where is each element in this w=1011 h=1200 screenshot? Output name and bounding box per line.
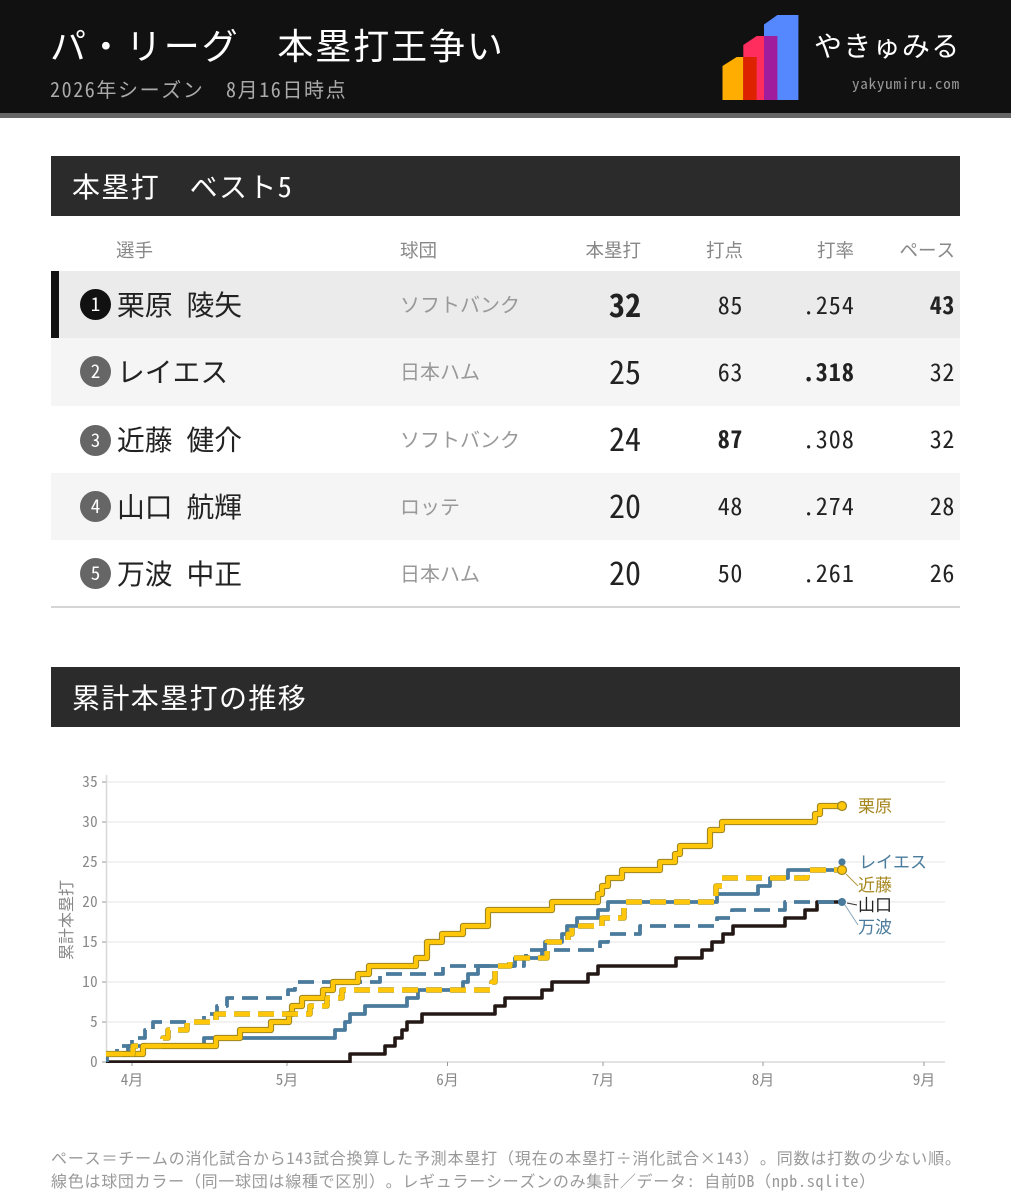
line chart: cumulative home runs xyxy=(53,771,945,1090)
footnote xyxy=(51,1145,962,1192)
leader lines xyxy=(845,874,858,925)
row 1: ソフトバンク xyxy=(400,289,520,318)
logo mark xyxy=(722,15,798,100)
line: Kurihara xyxy=(106,806,842,1054)
x axis month labels: 5月 xyxy=(276,1069,298,1090)
row 3: 87 xyxy=(718,420,743,455)
column headers: ペース xyxy=(899,237,955,263)
row 4 xyxy=(51,473,960,540)
row 5: 20 xyxy=(609,549,641,595)
column headers xyxy=(116,237,955,263)
y axis tick labels: 25 xyxy=(82,851,98,872)
row 1: 85 xyxy=(718,286,743,321)
subtitle: 2026年シーズン 8月16日時点 xyxy=(50,74,347,103)
row 4: 48 xyxy=(718,487,743,522)
y axis tick labels: 5 xyxy=(90,1011,98,1032)
row 2: .318 xyxy=(803,353,855,388)
y axis title: 累計本塁打 xyxy=(53,880,77,960)
row 3: ソフトバンク xyxy=(400,424,520,453)
series labels: 近藤 xyxy=(858,871,892,896)
row 4: 20 xyxy=(609,482,641,528)
row 2: 63 xyxy=(718,353,743,388)
y axis tick labels: 0 xyxy=(90,1051,98,1072)
row 4: 28 xyxy=(930,487,955,522)
row 1: 1 xyxy=(91,290,100,317)
heading: best 5 xyxy=(51,156,960,216)
series labels: 栗原 xyxy=(858,792,892,817)
header band xyxy=(0,0,1011,118)
x axis month labels: 9月 xyxy=(913,1069,935,1090)
line: Yamaguchi xyxy=(106,902,842,1062)
column headers: 選手 xyxy=(116,237,153,263)
column headers: 打率 xyxy=(817,237,854,263)
x axis month labels: 4月 xyxy=(121,1069,143,1090)
row 4: ロッテ xyxy=(400,491,460,520)
row 2: 25 xyxy=(609,348,641,394)
series labels: レイエス xyxy=(859,848,927,873)
row 2: 日本ハム xyxy=(400,356,480,385)
x axis month labels: 7月 xyxy=(592,1069,614,1090)
row 4: 4 xyxy=(91,492,100,519)
y axis tick labels: 10 xyxy=(82,971,98,992)
title: パ・リーグ 本塁打王争い xyxy=(50,18,505,70)
y axis tick labels: 15 xyxy=(82,931,98,952)
footnote: ペース＝チームの消化試合から143試合換算した予測本塁打（現在の本塁打÷消化試合×143）。同数は打数の少ない順。 xyxy=(51,1145,962,1169)
row 5 xyxy=(51,540,960,608)
row 1: 32 xyxy=(609,281,641,327)
column headers: 本塁打 xyxy=(585,237,641,263)
end point markers xyxy=(838,802,846,906)
row 5: .261 xyxy=(803,554,855,589)
row 2: レイエス xyxy=(117,351,228,391)
brand url: yakyumiru.com xyxy=(852,73,960,94)
line: Mannami xyxy=(106,902,842,1054)
heading: trend xyxy=(51,667,960,727)
heading: best 5: 本塁打 ベスト5 xyxy=(72,166,293,206)
y axis tick labels: 20 xyxy=(82,891,98,912)
y axis tick labels: 35 xyxy=(82,771,98,792)
row 5: 50 xyxy=(718,554,743,589)
row 3 xyxy=(51,406,960,473)
series labels: 万波 xyxy=(858,913,892,938)
row 2: 2 xyxy=(91,357,100,384)
row 4: .274 xyxy=(803,487,855,522)
row 3: .308 xyxy=(803,420,855,455)
y axis tick labels: 30 xyxy=(82,811,98,832)
row 4: 山口 航輝 xyxy=(117,486,242,526)
column headers: 球団 xyxy=(400,237,437,263)
series labels xyxy=(858,792,927,938)
brand name: やきゅみる xyxy=(814,25,961,65)
series labels: 山口 xyxy=(858,891,892,916)
row 1: .254 xyxy=(803,286,855,321)
x axis month labels xyxy=(121,1069,935,1090)
table: home run best 5 xyxy=(51,237,960,608)
y axis tick labels xyxy=(82,771,98,1072)
line: Reyes xyxy=(107,870,842,1062)
heading: trend: 累計本塁打の推移 xyxy=(72,677,307,717)
row 5: 日本ハム xyxy=(400,558,480,587)
line: Kondo xyxy=(106,870,842,1054)
row 1: 43 xyxy=(930,286,955,321)
column headers: 打点 xyxy=(706,237,743,263)
footnote: 線色は球団カラー（同一球団は線種で区別）。レギュラーシーズンのみ集計／データ: 自前DB（npb.sqlite） xyxy=(51,1168,876,1192)
row 3: 32 xyxy=(930,420,955,455)
row 3: 24 xyxy=(609,415,641,461)
row 2: 32 xyxy=(930,353,955,388)
row 1 xyxy=(51,271,960,338)
row 5: 26 xyxy=(930,554,955,589)
row 5: 万波 中正 xyxy=(117,553,242,593)
x axis month labels: 8月 xyxy=(752,1069,774,1090)
row 3: 近藤 健介 xyxy=(117,419,242,459)
row 5: 5 xyxy=(91,559,100,586)
row 2 xyxy=(51,338,960,406)
row 1: 栗原 陵矢 xyxy=(117,284,242,324)
x axis month labels: 6月 xyxy=(436,1069,459,1090)
row 3: 3 xyxy=(91,426,100,453)
